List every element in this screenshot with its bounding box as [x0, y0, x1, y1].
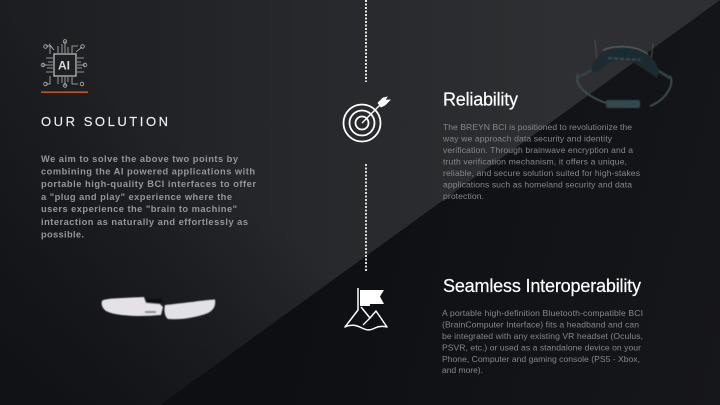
text block: solution description: users experience the "brain to machine" — [41, 204, 237, 214]
image: dark VR headset — [577, 40, 671, 108]
headset spikes — [595, 40, 653, 62]
icon label: AI: AI — [58, 58, 70, 72]
text block: solution description: a "plug and play" experience where the — [41, 192, 232, 202]
heading: seamless interoperability: Seamless Interoperability — [443, 276, 641, 296]
text block: reliability description: truth verification mechanism, it offers a unique, — [443, 156, 627, 166]
icon: flag on mountains — [345, 288, 387, 330]
text block: reliability description — [442, 122, 640, 201]
text block: solution description: interaction as naturally and effortlessly as — [41, 217, 248, 227]
text block: interoperability description — [442, 308, 643, 375]
dotted line top — [365, 0, 367, 82]
text block: solution description: possible. — [41, 230, 84, 240]
text block: reliability description: reliable, and secure solution suited for high-stakes — [443, 168, 640, 178]
headset mask body — [592, 47, 659, 78]
image: white headband — [102, 297, 215, 319]
orange underline — [41, 92, 88, 93]
text block: interoperability description: and more). — [442, 365, 483, 375]
text block: solution description — [41, 154, 256, 240]
text block: solution description: combining the AI powered applications with — [41, 166, 255, 176]
text block: reliability description: The BREYN BCI is positioned to revolutionize the — [443, 122, 632, 132]
text block: interoperability description: Phone, Computer and gaming console (PS5 - Xbox, — [442, 354, 640, 364]
dotted line middle — [365, 164, 367, 271]
headset arms — [577, 70, 670, 78]
text block: interoperability description: be integrated with any existing VR headset (Oculus, — [442, 331, 643, 341]
text block: interoperability description: PSVR, etc.) or used as a standalone device on your — [442, 342, 641, 352]
text block: solution description: portable high-quality BCI interfaces to offer — [41, 179, 256, 189]
text block: reliability description: protection. — [443, 191, 484, 201]
text block: solution description: We aim to solve the above two points by — [41, 154, 239, 164]
heading: reliability: Reliability — [443, 90, 518, 110]
text block: interoperability description: (BrainComputer Interface) fits a headband and can — [442, 320, 639, 330]
text block: reliability description: way we approach data security and identity — [442, 134, 613, 144]
text block: interoperability description: A portable high-definition Bluetooth-compatible BCI — [442, 308, 643, 318]
headset pad — [606, 100, 640, 108]
text block: reliability description: applications such as homeland security and data — [443, 180, 632, 190]
headset straps — [577, 74, 671, 106]
icon: target with arrow — [344, 97, 390, 142]
text block: reliability description: verification. Through brainwave encryption and a — [443, 145, 633, 155]
heading: our solution: OUR SOLUTION — [41, 114, 168, 129]
icon: AI chip — [41, 40, 87, 87]
